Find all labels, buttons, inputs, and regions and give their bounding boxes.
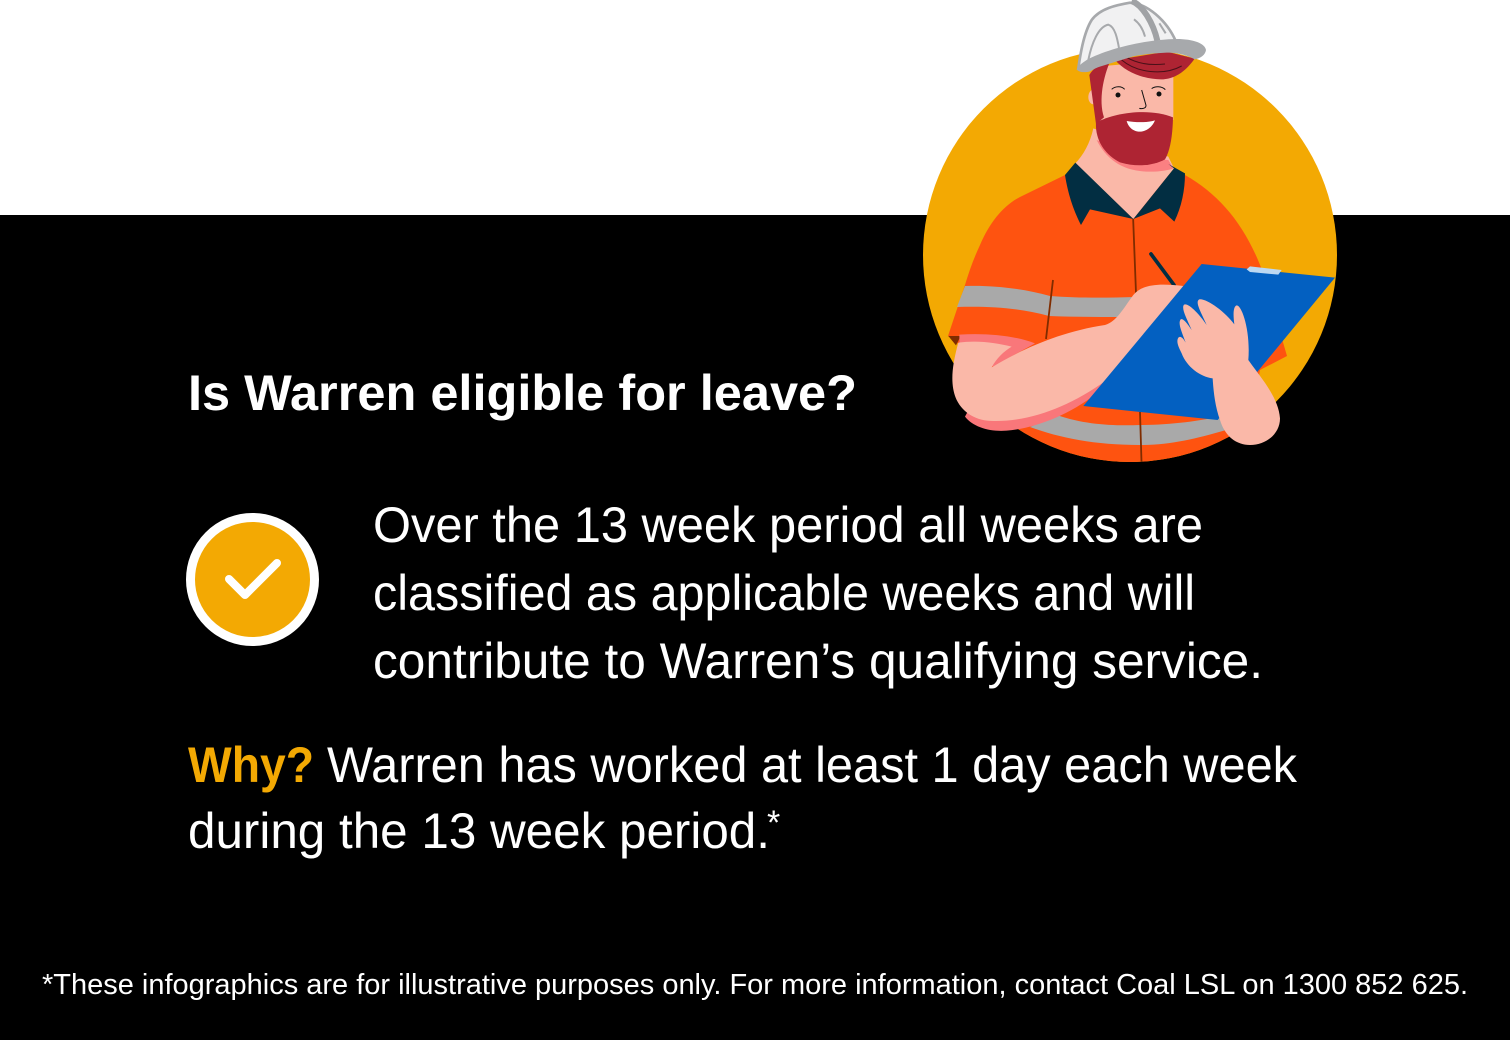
text block: why: Why?	[188, 737, 314, 793]
sleeve underside	[948, 336, 961, 345]
hand and arm holding clipboard	[1177, 299, 1280, 445]
head and upper body, drawn in crop coordinates	[1065, 1, 1206, 225]
side hair	[1089, 60, 1111, 124]
neck	[1075, 128, 1174, 219]
text block: why	[188, 737, 1298, 859]
high-vis shirt and bands	[948, 175, 1287, 480]
smile	[1127, 120, 1155, 132]
helmet shell	[1078, 3, 1176, 68]
arm shadow	[959, 334, 1107, 431]
clipboard	[1083, 264, 1335, 420]
pen	[1151, 254, 1174, 285]
fringe	[1115, 52, 1195, 79]
text block: why: *	[767, 804, 780, 842]
collar	[1065, 163, 1185, 225]
helmet details	[1088, 19, 1166, 60]
top white band	[0, 0, 1510, 215]
helmet brim	[1077, 39, 1206, 72]
helmet ribs	[1132, 1, 1157, 41]
icon: check mark badge	[190, 518, 314, 642]
forearm writing	[952, 285, 1183, 421]
yellow circle backdrop	[923, 48, 1337, 462]
text block: why: Warren has worked at least 1 day each week	[327, 737, 1298, 793]
beard	[1096, 112, 1173, 165]
fringe strands	[1122, 57, 1182, 72]
footnote: *These infographics are for illustrative purposes only. For more information, contact Coal LSL on 1300 852 625.	[42, 969, 1468, 1001]
text block: eligibility explanation: contribute to Warren’s qualifying service.	[373, 633, 1263, 689]
brows and nose	[1112, 87, 1165, 109]
ear	[1088, 90, 1098, 104]
text block: eligibility explanation: classified as applicable weeks and will	[373, 565, 1195, 621]
clipboard clip	[1247, 266, 1282, 275]
arms and clipboard, drawn in crop coordinates	[948, 254, 1335, 445]
heading: Is Warren eligible for leave?	[188, 365, 857, 421]
text block: eligibility explanation: Over the 13 week period all weeks are	[373, 497, 1203, 553]
face	[1097, 60, 1173, 127]
text block: eligibility explanation	[373, 497, 1263, 689]
beard shadow	[1097, 140, 1173, 172]
eyes	[1115, 91, 1161, 97]
text block: why: during the 13 week period.	[188, 803, 770, 859]
illustration: Warren the worker with clipboard	[923, 1, 1337, 480]
